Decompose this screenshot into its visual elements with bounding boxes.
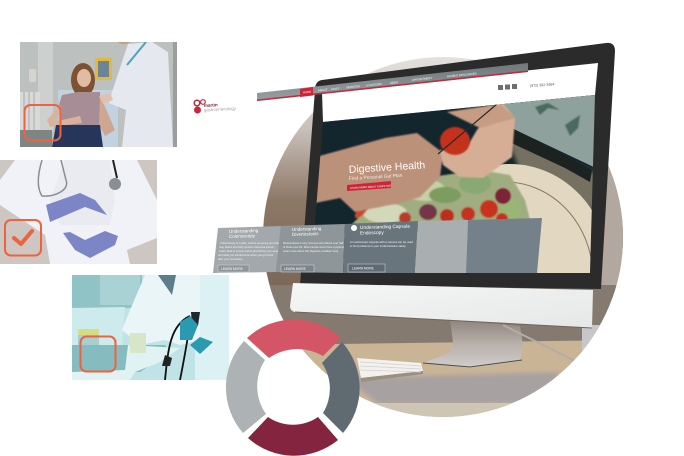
photo: patient with doctor: [20, 42, 177, 147]
empty panel: light: [415, 220, 468, 273]
website header: [322, 63, 598, 122]
empty panel: dark: [466, 218, 542, 273]
company logo: gastroenterology: [204, 106, 237, 112]
hero button: LEARN MORE ABOUT DIGESTIVE: [350, 183, 391, 190]
small device on desk: [582, 325, 600, 351]
hands: [305, 100, 515, 212]
panel: colonoscopy: Learn what to expect before and during your exam: [219, 249, 280, 253]
hero photo: [311, 95, 595, 273]
panel: colonoscopy: Colonoscopy: [229, 233, 256, 239]
orange frame 3: [80, 336, 116, 372]
monitor bezel: [300, 43, 615, 289]
info panels: [213, 218, 542, 273]
panel: capsule endoscopy: Understanding Capsule: [360, 224, 411, 231]
hero title: Digestive Health: [348, 159, 426, 176]
navigation bar: PATIENT RESOURCES: [447, 71, 477, 78]
social icons: [498, 84, 517, 90]
panel: capsule endoscopy: An endoscopic capsule with a camera can be used: [350, 240, 413, 244]
panel: colonoscopy: [213, 226, 281, 273]
panel: colonoscopy: Understanding: [229, 228, 259, 234]
navigation bar: NEWS: [390, 80, 399, 85]
photo: doctor with gloves: [0, 160, 157, 264]
panel: diverticulosis: Diverticulosis: [292, 231, 319, 237]
knife: [438, 104, 497, 154]
keyboard: [357, 358, 423, 382]
panel: colonoscopy: after your procedure.: [218, 257, 243, 261]
panel: capsule endoscopy: [343, 221, 418, 273]
segment: top red: [247, 320, 341, 358]
panel: diverticulosis: Understanding: [292, 226, 322, 232]
monitor silver chin: [290, 283, 593, 328]
company logo: [194, 100, 237, 114]
panel: diverticulosis: [276, 224, 346, 273]
panel: colonoscopy: LEARN MORE: [221, 267, 244, 271]
navigation bar: [257, 63, 528, 101]
panel: diverticulosis: Diverticulosis is very common and affects over half: [283, 241, 344, 245]
navigation bar: HOME: [303, 90, 312, 94]
navigation bar: SERVICES: [346, 84, 360, 89]
tomato: [440, 127, 470, 155]
orange check badge: [5, 220, 41, 256]
monitor: [290, 42, 615, 328]
navigation bar: LOCATIONS: [366, 82, 382, 87]
photo: endoscope: [72, 275, 229, 380]
navigation bar: ABOUT: [318, 87, 328, 92]
company logo: martin: [204, 102, 218, 108]
panel: colonoscopy: and what you should know when you go home: [218, 253, 274, 257]
phone number: (972) 392-3364: [530, 82, 555, 88]
hero subtitle: Find a Personal Gut Plan: [349, 173, 403, 182]
panel: capsule endoscopy: Endoscopy: [360, 230, 384, 236]
blurred background right: [512, 144, 593, 211]
dark tray rim: [512, 129, 592, 182]
salad: [352, 172, 530, 224]
segment: left light gray: [226, 341, 266, 433]
stethoscope: [38, 160, 67, 196]
segment: bottom maroon: [248, 417, 338, 456]
panel: diverticulosis: of those over 60. Most people never have symptoms.: [283, 245, 346, 249]
donut chart: [226, 320, 360, 456]
cable: [503, 325, 575, 361]
navigation bar: STAFF: [331, 86, 340, 91]
leaf shapes: [535, 103, 580, 136]
nav active item: [300, 87, 313, 97]
monitor stand: [423, 320, 523, 368]
panel: diverticulosis: Learn more about this digestive condition here.: [283, 249, 339, 253]
top-right teal wall: [496, 95, 595, 167]
segment: right gray: [322, 342, 360, 433]
plate: [415, 164, 592, 273]
panel: capsule endoscopy: LEARN MORE: [352, 266, 375, 270]
panel: colonoscopy: may detect and help prevent colorectal cancer.: [219, 245, 275, 249]
hero button: [347, 181, 391, 191]
orange frame 1: [24, 105, 60, 140]
panel: diverticulosis: LEARN MORE: [284, 267, 307, 271]
navigation bar: APPOINTMENT: [412, 76, 432, 82]
background circle desk scene: [263, 57, 630, 420]
panel: colonoscopy: Colonoscopy is a safe, routine screening test that: [220, 241, 279, 245]
panel: capsule endoscopy: to find problems in your small intestine safely.: [350, 244, 406, 248]
